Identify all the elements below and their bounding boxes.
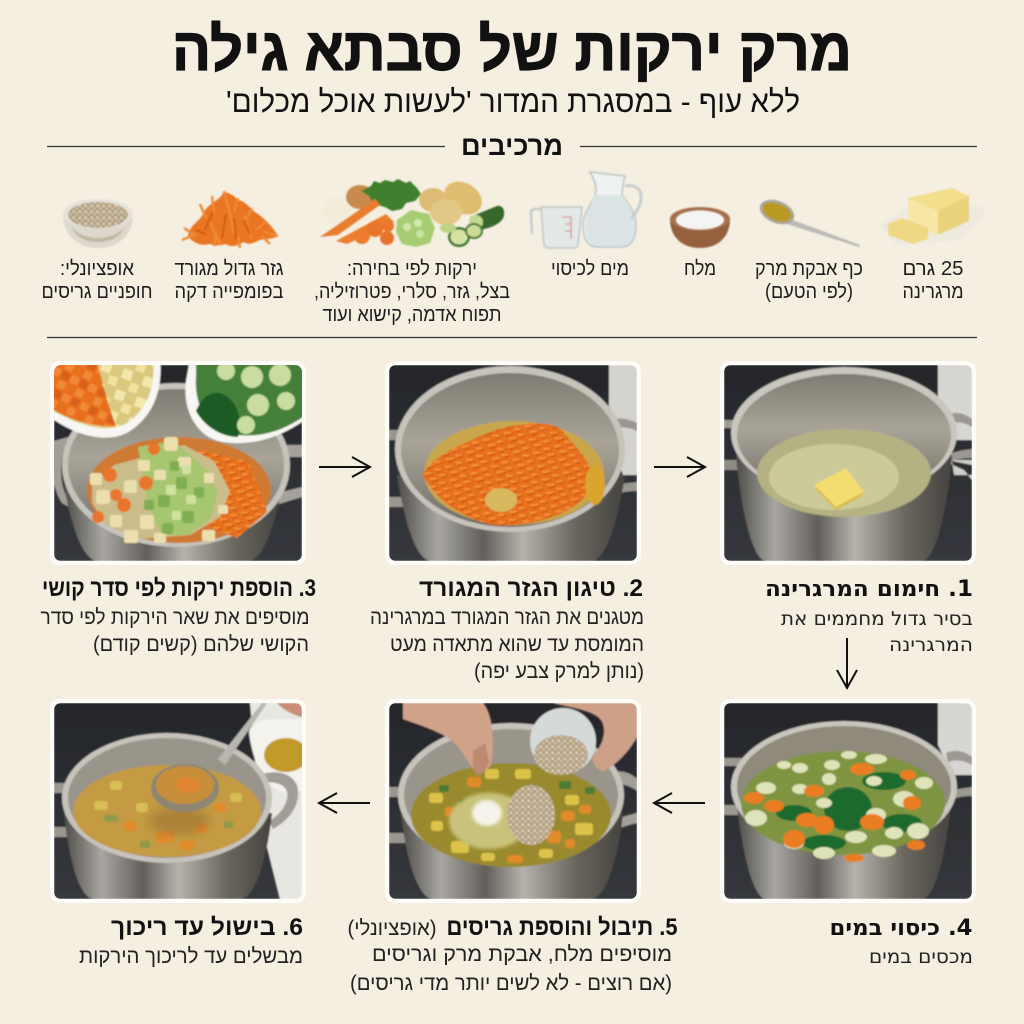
panel: ingredients [42, 172, 986, 326]
heading: ingredients: מרכיבים [461, 131, 563, 161]
panel: step 5 photo [385, 699, 641, 903]
label: margarine: מרגרינה [902, 281, 964, 303]
title: מרק ירקות של סבתא גילה [172, 16, 852, 83]
label: vegetables: בצל, גזר, סלרי, פטרוזיליה, [314, 281, 510, 303]
text: step 6: 6. בישול עד ריכוך [111, 914, 303, 941]
text: step 1: המרגרינה [889, 634, 973, 656]
text: step 4: מכסים במים [869, 946, 973, 968]
text: step 1: 1. חימום המרגרינה [765, 577, 973, 602]
text: step 4: 4. כיסוי במים [830, 916, 972, 941]
panel: step 4 photo [720, 699, 976, 903]
label: soup powder: כף אבקת מרק [755, 258, 863, 280]
text: step 2: מטגנים את הגזר המגורד במרגרינה [370, 606, 644, 629]
text: step 2 [370, 575, 644, 683]
text: step 5: 5. תיבול והוספת גריסים [446, 914, 678, 941]
text: step 2: 2. טיגון הגזר המגורד [419, 575, 643, 602]
text: step 6 [79, 914, 303, 968]
label: carrot: בפומפייה דקה [174, 281, 284, 303]
panel: step 1 photo [720, 361, 976, 565]
icon: groats bowl [63, 199, 133, 248]
text: step 3: 3. הוספת ירקות לפי סדר קושי [42, 575, 316, 602]
right bowl [185, 359, 306, 443]
arrow: step 5 to step 6 [319, 793, 370, 813]
icon: salt bowl [670, 207, 730, 248]
left bowl [50, 359, 161, 438]
panel: step 3 photo [50, 359, 306, 565]
label: groats: חופניים גריסים [42, 281, 152, 303]
arrow: step 3 to step 2 direction [319, 457, 370, 477]
subtitle: ללא עוף - במסגרת המדור 'לעשות אוכל מכלום' [226, 84, 800, 119]
panel: step 2 photo [385, 361, 641, 565]
label: vegetables: תפוח אדמה, קישוא ועוד [322, 304, 502, 326]
label: margarine [902, 258, 964, 303]
label: vegetables [314, 258, 510, 326]
label: margarine: 25 גרם [902, 258, 964, 280]
arrow: between step 2 and step 1 [654, 457, 705, 477]
text: step 3: מוסיפים את שאר הירקות לפי סדר [40, 606, 310, 629]
arrow: step 4 to step 5 [654, 793, 705, 813]
arrow: step 1 down to step 4 [837, 638, 857, 688]
text: step 1: בסיר גדול מחממים את [781, 608, 973, 630]
text: step 4 [830, 916, 973, 968]
text: step 5: מוסיפים מלח, אבקת מרק וגריסים [372, 943, 672, 966]
label: carrot: גזר גדול מגורד [174, 258, 284, 280]
icon: margarine [880, 188, 986, 245]
text: step 3: הקושי שלהם (קשים קודם) [93, 633, 309, 656]
label: vegetables: ירקות לפי בחירה: [347, 258, 477, 280]
text: step 6: מבשלים עד לריכוך הירקות [79, 945, 303, 968]
label: groats [42, 258, 152, 303]
label: salt: מלח [684, 258, 716, 280]
text: step 5 [348, 914, 678, 995]
label: carrot [174, 258, 284, 303]
text: step 2: (נותן למרק צבע יפה) [474, 660, 644, 683]
text: step 1 [765, 577, 973, 656]
text: step 5: (אופציונלי) [348, 917, 436, 940]
label: soup powder [755, 258, 863, 303]
icon: grated carrot [182, 191, 278, 248]
icon: mixed vegetables [320, 175, 504, 247]
icon: measuring cup and water jug [531, 172, 641, 248]
text: step 5: (אם רוצים - לא לשים יותר מדי גריסים) [350, 972, 672, 995]
text: step 3 [40, 575, 316, 656]
text: step 2: המומסת עד שהוא מתאדה מעט [390, 633, 644, 656]
icon: spoon of soup powder [756, 195, 860, 247]
label: groats: אופציונלי: [60, 258, 134, 280]
panel: step 6 photo [50, 699, 308, 903]
label: soup powder: (לפי הטעם) [765, 281, 853, 303]
label: water: מים לכיסוי [551, 258, 629, 280]
